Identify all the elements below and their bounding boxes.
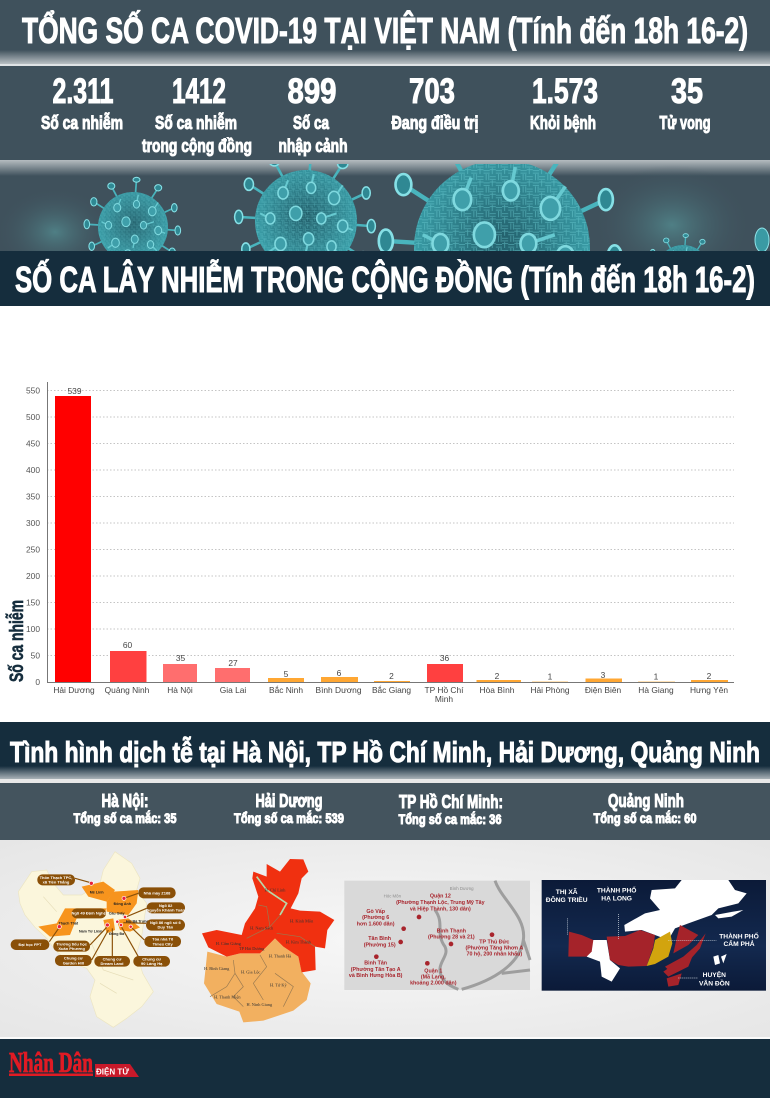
place labels: THÀNH PHỐ [719, 930, 759, 940]
stat: deaths [660, 72, 710, 133]
total: Quảng Ninh [594, 791, 697, 826]
district labels [349, 894, 523, 987]
stat: total cases: Số ca nhiễm [41, 112, 123, 133]
category labels: Quảng Ninh [105, 685, 150, 695]
stat: under treatment: 703 [409, 72, 455, 111]
place labels: HUYỆN [703, 970, 726, 979]
pins [57, 881, 132, 929]
district labels: Bình Tân [364, 961, 387, 967]
highlighted districts [38, 882, 140, 937]
stat: community cases [142, 72, 252, 156]
district names: H. Thanh Miện [214, 994, 241, 999]
y axis ticks: 500 [26, 412, 40, 422]
district borders [210, 905, 315, 1007]
district names: Cầu Giấy [109, 911, 126, 915]
district names: Nam Từ Liêm [79, 930, 103, 934]
value labels: 539 [68, 386, 82, 396]
place labels: HẠ LONG [601, 896, 632, 903]
value labels: 1 [654, 672, 659, 682]
illustration: coronavirus particles [20, 164, 770, 251]
district labels: (Phường 28 và 21) [428, 935, 475, 941]
map: Hải Dương [202, 859, 334, 1022]
place labels: VÂN ĐỒN [699, 978, 730, 988]
pill labels: Garden Hill [63, 960, 84, 965]
district markers [374, 915, 494, 966]
category labels: Bắc Ninh [269, 685, 303, 695]
stat: community cases: 1412 [172, 72, 226, 111]
map: TP Hồ Chí Minh [344, 881, 530, 990]
pill labels: Tòa nhà T6 [152, 937, 174, 942]
district labels: (Phường Tăng Nhơn A [465, 945, 523, 951]
total: TP Hồ Chí Minh: Tổng số ca mắc: 36 [398, 810, 502, 827]
affected districts [202, 859, 334, 972]
stat: recovered: Khỏi bệnh [530, 113, 596, 133]
value labels: 36 [440, 653, 449, 663]
stat: deaths: Tử vong [660, 113, 710, 133]
location pills [11, 874, 185, 967]
district labels: Gò Vấp [366, 908, 386, 915]
bar chart: community cases by province [6, 382, 734, 704]
stat: community cases: Số ca nhiễm [155, 112, 237, 133]
pill labels: Dream Land [100, 961, 124, 966]
place labels: THỊ XÃ [556, 887, 578, 896]
y axis ticks: 50 [31, 650, 40, 660]
pill labels: Ngõ 49 Định Nghệ [72, 911, 107, 916]
stat: deaths: 35 [671, 72, 703, 111]
panel: national statistics [41, 72, 710, 156]
pill labels: Nhà máy Z168 [144, 890, 171, 895]
y axis ticks: 300 [26, 518, 40, 528]
district names: Đống Đa [109, 932, 125, 936]
pill labels: Đại học FPT [18, 942, 42, 947]
total: Hà Nội: Tổng số ca mắc: 35 [74, 809, 177, 826]
y axis ticks: 400 [26, 465, 40, 475]
district names: H. Cẩm Giàng [216, 941, 242, 946]
district names [59, 890, 149, 936]
value labels: 5 [284, 669, 289, 679]
value labels [68, 386, 712, 682]
total: Hải Dương: Hải Dương [256, 791, 322, 811]
total: TP Hồ Chí Minh: TP Hồ Chí Minh: [399, 792, 503, 812]
logo: Nhân Dân điện tử: ĐIỆN TỬ [96, 1068, 129, 1076]
pill labels: Nguyễn Khánh Toàn [146, 908, 185, 913]
district labels: TP Thủ Đức [479, 939, 509, 945]
value labels: 3 [601, 670, 606, 680]
district names: H. Ninh Giang [247, 1002, 273, 1007]
category labels [53, 685, 728, 704]
category labels: Điện Biên [585, 685, 621, 695]
stat: under treatment [392, 72, 478, 133]
footer band [0, 1037, 770, 1098]
y axis ticks: 550 [26, 386, 40, 396]
neighbouring labels [384, 886, 474, 899]
place labels: CẨM PHẢ [723, 939, 755, 948]
pill labels: Xuân Phương [58, 946, 85, 951]
total: Hà Nội: Hà Nội: [102, 791, 148, 811]
stat: imported cases: nhập cảnh [278, 136, 348, 156]
district names: H. Gia Lộc [241, 969, 260, 974]
axes [48, 382, 734, 682]
category labels: Minh [435, 694, 453, 704]
district labels: và Bình Hưng Hòa B) [349, 973, 403, 979]
stat: imported cases: 899 [288, 72, 336, 111]
district labels: (Phường 6 [362, 915, 389, 921]
value labels: 1 [548, 672, 553, 682]
stat: total cases: 2.311 [52, 72, 114, 111]
total: Hà Nội [74, 791, 177, 826]
category labels: Hải Phòng [530, 685, 570, 695]
category labels: Hưng Yên [690, 685, 728, 695]
panel: maps background [0, 840, 770, 1040]
place labels: ĐÔNG TRIỀU [546, 894, 588, 904]
total: TP Hồ Chí Minh [398, 792, 503, 827]
unaffected land [587, 880, 747, 982]
place labels [546, 885, 759, 988]
y axis title: Số ca nhiễm [6, 600, 28, 682]
district names: H. Kim Thành [286, 939, 312, 944]
district names: H. Tứ Kỳ [270, 983, 287, 988]
district labels: Bình Thạnh [437, 929, 466, 935]
logo: Nhân Dân điện tử: Nhân Dân [9, 1048, 93, 1079]
y axis ticks: 350 [26, 492, 40, 502]
total: Hải Dương [234, 791, 344, 826]
value labels: 35 [176, 653, 185, 663]
pill labels: xã Tiền Thắng [43, 880, 70, 885]
stat: recovered: 1.573 [532, 72, 598, 111]
neighbouring labels: Bình Dương [450, 886, 474, 891]
pill labels: Ngõ 86 ngõ số 6 [150, 920, 181, 925]
district labels: (Phường 15) [364, 942, 396, 948]
value labels: 60 [123, 640, 132, 650]
y axis ticks: 100 [26, 624, 40, 634]
district labels: 70 hộ, 200 nhân khẩu) [466, 951, 522, 958]
value labels: 6 [337, 668, 342, 678]
district labels: (Mã Lạng, [421, 974, 446, 980]
district names: H. Thanh Hà [269, 954, 291, 959]
stat: recovered [530, 72, 598, 133]
y axis ticks [26, 386, 40, 687]
y axis ticks: 250 [26, 544, 40, 554]
pill labels: 90 Láng Hạ [141, 961, 163, 966]
stat: community cases: trong cộng đồng [142, 136, 252, 156]
pill labels: Chung cư [103, 956, 122, 961]
total: Hải Dương: Tổng số ca mắc: 539 [234, 809, 344, 826]
stat: imported cases: Số ca [293, 113, 330, 133]
value labels: 2 [389, 671, 394, 681]
category labels: Gia Lai [220, 685, 246, 695]
leader lines [567, 914, 717, 978]
district names: TP Hải Dương [239, 946, 265, 951]
district labels: khoảng 2.000 dân) [410, 981, 457, 987]
district names: H. Nam Sách [250, 925, 274, 930]
district labels: (Phường Tân Tạo A [351, 967, 401, 973]
panel: regional totals [0, 783, 770, 840]
heading band: epidemic situation [0, 722, 770, 783]
neighbouring labels: Hóc Môn [384, 894, 402, 899]
value labels: 2 [707, 671, 712, 681]
place labels: THÀNH PHỐ [597, 885, 636, 895]
pill labels: Thôn Thạch TPC, [40, 875, 72, 880]
y axis ticks: 450 [26, 438, 40, 448]
map: Quảng Ninh [542, 880, 766, 991]
district names: Thạch Thất [59, 922, 79, 926]
district names: Đông Anh [114, 902, 131, 906]
pill labels: Duy Tân [157, 925, 174, 930]
total: Quảng Ninh: Quảng Ninh [608, 791, 684, 811]
category labels: Bắc Giang [372, 685, 411, 695]
pill labels [18, 875, 185, 966]
category labels: TP Hồ Chí [425, 685, 464, 695]
pill labels: Ngõ 82 [159, 903, 173, 908]
pill labels: Chung cư [64, 956, 83, 961]
pill labels: Trường tiểu học [56, 941, 88, 946]
district names: Hai Bà Trưng [126, 919, 149, 923]
district names: H. Bình Giang [204, 966, 230, 971]
y axis ticks: 0 [35, 677, 40, 687]
category labels: Hà Giang [638, 685, 674, 695]
category labels: Bình Dương [315, 685, 362, 695]
y axis ticks: 200 [26, 571, 40, 581]
pill labels: Times City [153, 941, 173, 946]
district labels: và Hiệp Thành, 130 dân) [410, 906, 471, 912]
stat: total cases [41, 72, 123, 133]
unaffected districts [204, 938, 311, 1022]
category labels: Hòa Bình [480, 685, 515, 695]
affected districts [568, 925, 706, 987]
district labels: hơn 1.600 dân) [357, 921, 395, 927]
y axis ticks: 150 [26, 598, 40, 608]
district names: H. Kinh Môn [290, 918, 314, 923]
river [435, 881, 530, 989]
value labels: 27 [228, 658, 238, 668]
category labels: Hà Nội [167, 685, 193, 695]
bars [55, 396, 728, 682]
highlighted district [647, 932, 672, 966]
total: Quảng Ninh: Tổng số ca mắc: 60 [594, 809, 697, 826]
district names [204, 888, 314, 1007]
district names: H. Chí Linh [265, 888, 286, 893]
stat: imported cases [278, 72, 348, 156]
stat: under treatment: Đang điều trị [392, 113, 478, 133]
district labels: Quận 1 [424, 968, 442, 974]
district labels: Quận 12 [430, 894, 451, 900]
district labels: Tân Bình [368, 936, 391, 942]
pill labels: Chung cư [142, 956, 161, 961]
value labels: 2 [495, 671, 500, 681]
category labels: Hải Dương [53, 685, 95, 695]
district labels: (Phường Thạnh Lộc, Trung Mỹ Tây [396, 900, 485, 906]
district names: Mê Linh [90, 890, 104, 894]
connector lines [49, 878, 147, 960]
map: Hà Nội [11, 852, 185, 1027]
